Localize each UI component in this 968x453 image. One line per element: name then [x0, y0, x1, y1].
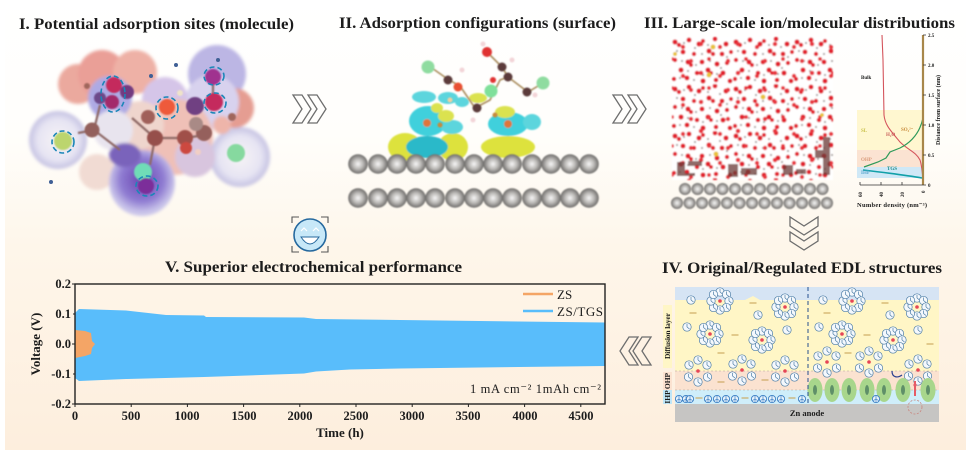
title: I. Potential adsorption sites: I. Potential adsorption sites (molecule)	[19, 16, 294, 33]
solvation clusters	[683, 288, 934, 386]
series: ZS/TGS	[75, 309, 605, 381]
legend: ZS	[557, 287, 572, 302]
condition note: 1 mA cm⁻² 1mAh cm⁻²	[470, 382, 601, 396]
panel: molecular dynamics snapshot	[671, 37, 833, 209]
atoms	[54, 69, 245, 194]
chart: number density vs distance: Number density (nm⁻³)	[857, 202, 927, 209]
chart: number density vs distance: 1.0	[928, 124, 935, 129]
panel: adsorption on Zn surface	[348, 42, 599, 208]
charge density	[388, 91, 541, 161]
chart: number density vs distance: 2.0	[928, 64, 935, 69]
x-axis labels: 4500	[568, 409, 594, 423]
chart: number density vs distance: Distance from surface (nm)	[935, 75, 942, 145]
chart: number density vs distance: 40	[880, 192, 885, 197]
x-axis labels: 2500	[344, 409, 368, 423]
chart: number density vs distance: OHP	[861, 158, 872, 163]
x-axis labels: 500	[122, 409, 140, 423]
x-axis labels: 1500	[232, 409, 256, 423]
x-axis labels: 3500	[456, 409, 480, 423]
arrow: II to III	[613, 95, 646, 123]
title: II. Adsorption configurations: II. Adsorption configurations (surface)	[339, 15, 616, 32]
chart: number density vs distance: 2.5	[928, 34, 935, 39]
y-axis labels: -0.1	[51, 367, 71, 381]
arrow: IV to V	[620, 337, 651, 365]
layer labels: OHP	[663, 372, 672, 389]
legend: ZS/TGS	[557, 304, 603, 319]
title: IV. Original/Regulated EDL structures: IV. Original/Regulated EDL structures	[662, 260, 942, 277]
arrow: I to II	[293, 95, 326, 123]
inner Helmholtz layer ions	[675, 395, 806, 403]
chart: number density vs distance: SO₄²⁻	[901, 127, 914, 133]
adsorbed TGS molecules	[808, 371, 936, 414]
chart: number density vs distance: Bulk	[861, 76, 872, 81]
Zn atoms rows	[348, 154, 599, 208]
y-axis labels	[51, 277, 71, 411]
x-axis labels: 0	[72, 409, 78, 423]
chart: number density vs distance	[857, 34, 942, 209]
x-axis labels: 4000	[512, 409, 538, 423]
chart: number density vs distance: 1.5	[928, 94, 935, 99]
chart: number density vs distance: 60	[859, 192, 864, 197]
plot frame	[75, 284, 605, 404]
chart: number density vs distance: 20	[901, 192, 906, 197]
layer labels: IHP	[663, 390, 672, 404]
x-axis title: Time (h)	[316, 425, 364, 440]
chart: number density vs distance: 0	[928, 184, 931, 189]
x-axis labels: 2000	[288, 409, 312, 423]
x-axis labels: 1000	[174, 409, 200, 423]
layer backgrounds	[663, 287, 939, 422]
divider	[807, 287, 809, 404]
y-axis title: Voltage (V)	[28, 313, 43, 375]
chart: number density vs distance: TGS	[887, 167, 897, 172]
y-axis labels: -0.2	[51, 397, 71, 411]
legend	[523, 287, 603, 319]
layer labels	[663, 312, 672, 404]
x-axis labels	[72, 409, 594, 423]
Zn anode label: Zn anode	[790, 408, 824, 418]
chart: number density vs distance: 0.5	[928, 154, 935, 159]
chart: number density vs distance: SL	[861, 129, 868, 134]
chart: number density vs distance: 0	[922, 190, 927, 193]
panel: molecule electrostatic potential surface	[29, 45, 270, 216]
series: ZS	[75, 330, 95, 358]
y-axis labels: 0.0	[55, 337, 71, 351]
panel: EDL structures	[663, 287, 939, 422]
chart: number density vs distance: IHP	[861, 171, 870, 176]
y-axis labels: 0.2	[55, 277, 71, 291]
icon: smiling face	[292, 217, 328, 252]
chart: number density vs distance: H₂O	[886, 133, 895, 138]
title: V. Superior electrochemical performance: V. Superior electrochemical performance	[165, 259, 462, 276]
y-axis labels: 0.1	[55, 307, 71, 321]
x-axis labels: 3000	[400, 409, 424, 423]
chart: voltage vs time	[28, 277, 605, 440]
title: III. Large-scale distributions: III. Large-scale ion/molecular distributions	[644, 15, 955, 32]
arrow: III to IV	[790, 217, 818, 250]
molecule atoms	[422, 42, 550, 128]
layer labels: Diffusion layer	[663, 312, 672, 359]
Zn atoms	[671, 183, 833, 209]
